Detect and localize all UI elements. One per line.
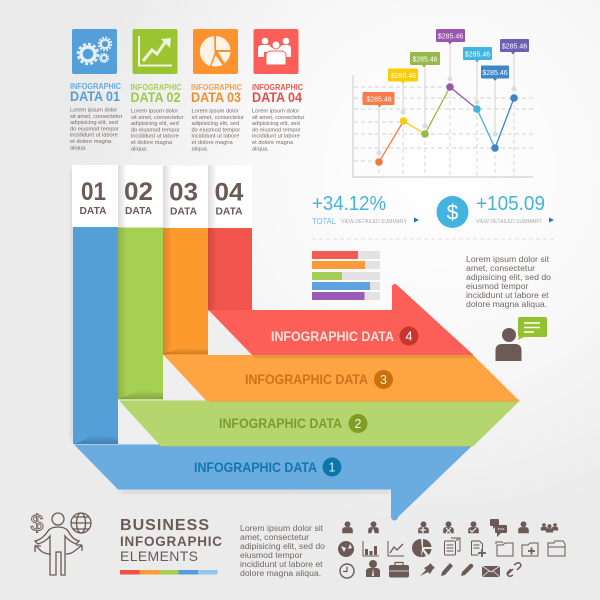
text: data 01: do eiusmod tempor [70,126,119,132]
text: data 04: Lorem ipsum dolor [252,108,299,114]
text: data 01 [70,81,123,151]
text: data 04 [252,82,305,152]
icon grid [338,519,565,578]
panel: arrow bands [74,284,520,520]
text: data 03: DATA 03 [191,89,241,105]
text: data 03: adipisicing elit, sed [192,121,239,127]
text: data 03: sit amet, consectetur [192,115,244,121]
band 4 red [208,284,474,355]
text block: right paragraph: eiusmod tempor [466,281,528,291]
text: data 02: et dolore magna [131,140,173,146]
text: data 01: sit amet, consectetur [70,114,123,120]
text: data 04: do eiusmod tempor [252,127,301,133]
text block: bottom paragraph: amet, consectetur [240,532,309,542]
icon: growth chart [132,29,178,74]
text: data 03: do eiusmod tempor [192,127,240,133]
text block: right paragraph [466,254,551,309]
line chart [353,29,533,177]
text: data 03: incididunt ut labore [192,134,239,140]
icon: businessman with dollar and globe: $ [31,510,44,536]
column 01: DATA [80,205,107,217]
text: data 03: et dolore magna [192,140,233,146]
band shadow [118,489,391,493]
chart labels [362,29,529,108]
text: data 01: incididunt ut labore [70,133,118,139]
title: business infographic elements: ELEMENTS [120,548,198,564]
column 02: 02 [124,178,153,206]
stems [379,42,514,153]
text: data 01: INFOGRAPHIC [70,81,121,91]
chart labels: $285.46 [465,52,490,58]
text block: bottom paragraph: Lorem ipsum dolor sit [240,523,324,533]
text: data 03 [191,82,244,152]
title: business infographic elements: INFOGRAPHIC [120,534,222,549]
text: data 02 [130,82,184,152]
column 01 [72,165,118,444]
band 2 green [119,399,520,446]
band 4 red: 4 [406,330,413,344]
column 01: 01 [81,178,106,206]
band 3 orange: 3 [380,373,387,387]
text: data 04: adipisicing elit, sed [252,121,300,127]
icon: gears [72,29,117,74]
band 1 blue: INFOGRAPHIC DATA [194,460,317,475]
color strip [120,570,218,574]
text: data 04: incididunt ut labore [252,134,300,140]
text: data 04: INFOGRAPHIC [252,82,303,92]
panel: stats [312,193,554,228]
text: data 02: adipisicing elit, sed [131,121,179,127]
text block: bottom paragraph: incididunt ut labore et [240,559,323,569]
row 3 clock, tools, mail, link [340,560,521,578]
text: data 02: Lorem ipsum dolor [131,108,178,114]
text block: bottom paragraph [240,523,325,578]
row 2 charts, documents, folders [338,538,565,557]
icon: businessman with dollar and globe [31,510,91,575]
text: data 02: sit amet, consectetur [131,115,184,121]
title: business infographic elements: BUSINESS [120,517,209,534]
band 1 blue: 1 [329,460,336,474]
chart labels: $285.46 [391,73,416,80]
chart labels: $285.46 [502,44,527,50]
text block: right paragraph: Lorem ipsum dolor sit [466,254,550,264]
text block: bottom paragraph: eiusmod tempor [240,550,302,560]
text: data 01: DATA 01 [70,88,120,104]
band 3 orange: INFOGRAPHIC DATA [245,372,368,387]
stat: percent: TOTAL [312,217,337,226]
text: data 02: INFOGRAPHIC [130,82,182,92]
text: data 03: aliqua. [192,146,209,152]
text: data 04: DATA 04 [252,89,302,105]
column 03: 03 [169,178,198,206]
title: business infographic elements [120,517,222,564]
stat: percent: VIEW DETAILED SUMMARY [341,219,408,225]
text: data 03: INFOGRAPHIC [191,82,242,92]
bar chart [312,251,380,300]
column 03 [163,166,208,355]
text: data 03: Lorem ipsum dolor [192,108,239,114]
stat: value [476,193,554,225]
text: data 01: et dolore magna [70,139,112,145]
panel: top icon cards [72,29,298,74]
text: data 04: sit amet, consectetur [252,115,305,121]
panel: top text columns [70,81,305,152]
column 04: 04 [214,178,244,206]
stat: value: VIEW DETAILED SUMMARY [476,219,543,225]
text: data 02: aliqua. [131,146,148,152]
chart labels: $285.46 [412,56,438,64]
band 3 orange [164,355,520,402]
icon: person with speech bubble [496,317,547,361]
column 02: DATA [125,205,152,217]
column 04 [208,166,252,311]
gap triangles [118,310,252,444]
text: data 01: aliqua. [70,145,87,151]
band 2 green: 2 [355,417,362,431]
text block: bottom paragraph: adipisicing elit, sed do [240,541,325,551]
text block: bottom paragraph: dolore magna aliqua. [240,568,321,578]
stat: percent [312,193,419,226]
text: data 04: aliqua. [252,146,269,152]
row 1 people icons [342,519,558,537]
icon: dollar: $ [447,202,459,224]
text block: right paragraph: adipisicing elit, sed do [466,272,551,282]
stat: percent: +34.12% [312,193,386,215]
column 04: DATA [216,206,243,218]
text: data 02: DATA 02 [130,89,181,105]
band 1 blue [74,444,474,520]
text block: right paragraph: amet, consectetur [466,263,535,273]
data line [379,87,514,162]
text block: right paragraph: incididunt ut labore et [466,290,549,300]
text: data 01: Lorem ipsum dolor [70,108,117,114]
column 02 [118,165,163,400]
chart labels: $285.46 [366,96,392,104]
icon: dollar [436,196,468,228]
text: data 02: do eiusmod tempor [131,127,180,133]
column 03: DATA [170,206,197,218]
column shadow [70,170,74,440]
icon: pie chart [193,29,238,74]
text: data 02: incididunt ut labore [131,134,179,140]
stat: value: +105.09 [476,193,545,215]
panel: number columns [70,165,252,444]
band 4 red: INFOGRAPHIC DATA [271,329,394,344]
text: data 04: et dolore magna [252,140,294,146]
text: data 01: adipisicing elit, sed [70,120,118,126]
icon: team [254,29,298,74]
chart labels: $285.46 [438,34,463,40]
text block: right paragraph: dolore magna aliqua. [466,299,547,309]
band 2 green: INFOGRAPHIC DATA [219,416,342,431]
chart labels: $285.46 [482,70,508,77]
